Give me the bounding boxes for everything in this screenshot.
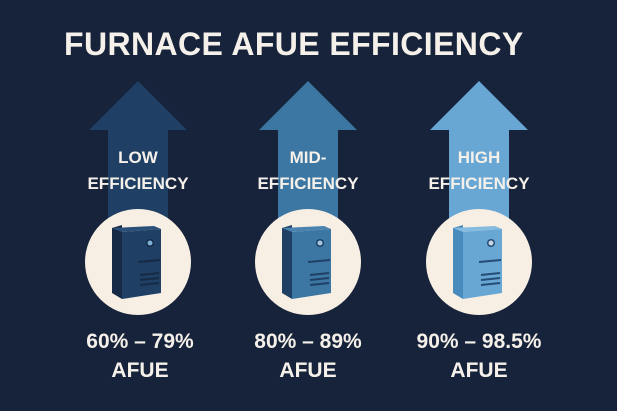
value: low: 60% – 79%	[86, 330, 194, 353]
icon: high furnace	[426, 209, 532, 315]
value: low	[86, 330, 194, 382]
label: high efficiency	[428, 148, 530, 193]
label: low efficiency: EFFICIENCY	[87, 174, 189, 193]
value: mid	[254, 330, 362, 382]
value: high	[417, 330, 541, 382]
arrow: mid	[259, 81, 357, 240]
value: mid: 80% – 89%	[254, 330, 362, 353]
label: high efficiency: EFFICIENCY	[428, 174, 530, 193]
label: mid efficiency: EFFICIENCY	[257, 174, 359, 193]
icon: low furnace	[85, 209, 191, 315]
label: low efficiency	[87, 148, 189, 193]
value: high: AFUE	[450, 359, 508, 382]
title: FURNACE AFUE EFFICIENCY	[64, 26, 524, 62]
arrow: low	[89, 81, 187, 240]
value: mid: AFUE	[279, 359, 337, 382]
value: high: 90% – 98.5%	[417, 330, 541, 353]
icon: mid furnace	[255, 209, 361, 315]
label: mid efficiency: MID-	[290, 148, 326, 167]
value: low: AFUE	[111, 359, 169, 382]
label: low efficiency: LOW	[118, 148, 158, 167]
arrow: high	[430, 81, 528, 240]
label: mid efficiency	[257, 148, 359, 193]
label: high efficiency: HIGH	[458, 148, 500, 167]
